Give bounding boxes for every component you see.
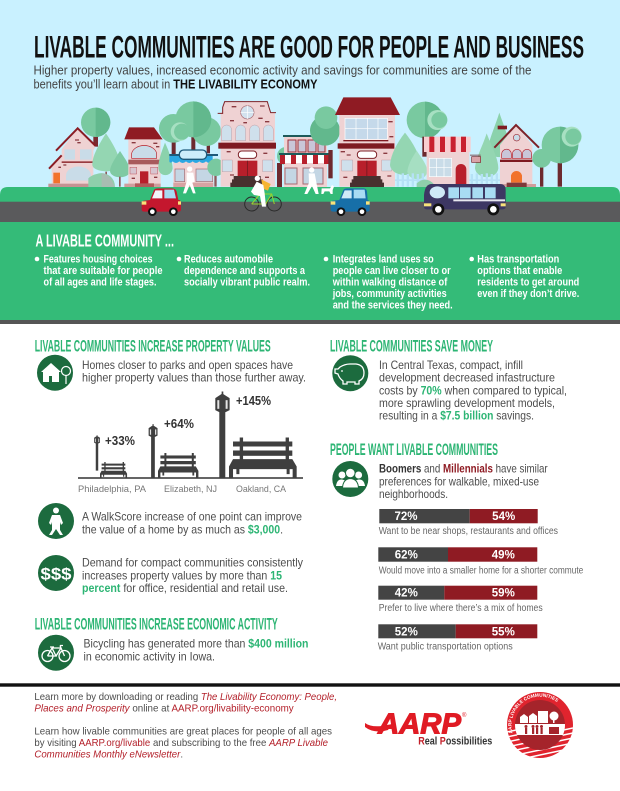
icon: pedestrian: [38, 503, 74, 539]
text block: boomers and millennials: preferences for walkable, mixed-use: [379, 474, 539, 488]
footer rule: [0, 683, 620, 687]
subtitle: [34, 62, 532, 91]
bar: near shops: 54%: [492, 511, 515, 523]
bullet: automobile dependence: [177, 254, 310, 288]
bar: smaller home: 62%: [395, 550, 418, 562]
bar: mix of homes: 42%: [395, 588, 418, 600]
icon: person walking dog: [304, 167, 334, 194]
road: [0, 202, 620, 222]
heading: LIVABLE COMMUNITIES INCREASE ECONOMIC ACTIVITY: [35, 616, 278, 634]
text block: central texas: costs by 70% when compared to typical,: [379, 383, 567, 397]
icon: bus: [424, 184, 506, 215]
text block: walkscore: A WalkScore increase of one point can improve: [82, 510, 302, 524]
footer text: learn more: [34, 691, 337, 715]
lamp and bench: Philadelphia: Philadelphia, PA: [78, 484, 147, 495]
text block: walkscore: the value of a home by as much as $3,000.: [82, 522, 283, 536]
middle shop: [277, 135, 331, 187]
bar: mix of homes: 59%: [492, 588, 515, 600]
text block: compact demand: percent for office, residential and retail use.: [82, 581, 288, 595]
subtitle: benefits you’ll learn about in THE LIVABILITY ECONOMY: [34, 76, 318, 91]
icon: red car: [142, 188, 181, 216]
bar: mix of homes: [378, 586, 543, 614]
text block: bicycling: [84, 637, 308, 664]
pointed trees: [92, 133, 120, 171]
grass strip: [0, 187, 620, 204]
street scene: buildings and trees: [48, 97, 582, 187]
footer text: learn how: Learn how livable communities are great places for people of all ages: [34, 725, 332, 737]
bullet: housing choices: [35, 254, 163, 288]
bullet: transportation options: [469, 254, 579, 300]
text block: central texas: In Central Texas, compact, infill: [379, 358, 523, 372]
bullet: transportation options: residents to get around: [477, 276, 579, 288]
bullet: automobile dependence: dependence and supports a: [184, 265, 306, 277]
badge: AARP Livable Communities: [507, 692, 573, 758]
subtitle: Higher property values, increased economic activity and savings for communities are some of the: [34, 62, 532, 77]
panel: a livable community: [0, 222, 620, 324]
bar: public transportation: 55%: [492, 626, 515, 638]
icon: cyclist: [245, 176, 281, 211]
lamp and bench: Philadelphia: +33%: [105, 433, 135, 448]
text block: parks: Homes closer to parks and open spaces have: [82, 358, 293, 372]
right house: [498, 126, 507, 129]
hero background: sky: [0, 0, 620, 204]
footer text: learn more: Places and Prosperity online at AARP.org/livability-economy: [34, 703, 294, 715]
bullet: transportation options: even if they don’t drive.: [477, 288, 579, 300]
bullet: integrated land uses: [324, 254, 453, 312]
bar: mix of homes: Prefer to live where there’s a mix of homes: [379, 603, 543, 614]
small red-roof house: [128, 139, 161, 185]
bullet: integrated land uses: and the services they need.: [333, 300, 453, 312]
bullet: housing choices: of all ages and life stages.: [44, 276, 156, 288]
footer text: learn how: by visiting AARP.org/livable and subscribing to the free AARP Livable: [34, 737, 328, 749]
text block: central texas: resulting in a $7.5 billion savings.: [379, 409, 534, 423]
text block: walkscore: [82, 510, 302, 536]
heading: A LIVABLE COMMUNITY ...: [36, 231, 174, 251]
icon: house and tree: [37, 355, 73, 391]
icon: dollar signs: [38, 555, 74, 591]
text block: compact demand: Demand for compact communities consistently: [82, 556, 303, 570]
right trees: [540, 165, 543, 187]
bar: smaller home: [378, 547, 584, 576]
text block: parks: higher property values than those further away.: [82, 371, 306, 385]
icon: piggy bank: [332, 355, 368, 391]
bullet: transportation options: options that enable: [477, 265, 562, 277]
AARP logo: Real Possibilities: [418, 735, 492, 747]
footer text: learn how: Communities Monthly eNewsletter.: [34, 748, 183, 760]
panel: economic activity: [35, 616, 308, 671]
bar: public transportation: 52%: [395, 626, 418, 638]
bar: public transportation: Want public transportation options: [378, 641, 513, 652]
icon: group of people: [332, 461, 368, 497]
bullet: transportation options: Has transportation: [477, 254, 560, 266]
bar: public transportation: [378, 624, 537, 652]
pointed trees and fences: [488, 113, 510, 157]
lamp and bench: Oakland: [215, 392, 297, 495]
AARP logo: ®: [462, 712, 467, 719]
lamp and bench: Elizabeth: +64%: [164, 416, 194, 431]
bar: near shops: [379, 509, 558, 537]
panel: people want livable communities: [330, 441, 584, 652]
lamp and bench: Oakland: Oakland, CA: [236, 484, 287, 495]
bar: smaller home: Would move into a smaller home for a shorter commute: [379, 565, 584, 576]
chart: park benches and lamps: [78, 392, 303, 495]
text block: central texas: more sprawling development models,: [379, 396, 555, 410]
text block: central texas: development decreased infastructure: [379, 371, 555, 385]
text block: central texas: [379, 358, 567, 423]
tall gabled building: [218, 102, 275, 187]
panel: property values: [35, 338, 306, 595]
text block: bicycling: in economic activity in Iowa.: [84, 650, 215, 664]
lamp and bench: Philadelphia: [78, 433, 147, 495]
text block: parks: [82, 358, 306, 385]
icon: dollar signs: $$$: [40, 564, 72, 584]
blue awning shop: [173, 162, 213, 187]
text block: boomers and millennials: neighborhoods.: [379, 487, 448, 501]
lamp and bench: Elizabeth: [149, 416, 217, 495]
left half of the street: [48, 101, 276, 187]
badge: AARP Livable Communities: AARP LIVABLE COMMUNITIES: [508, 693, 558, 734]
AARP logo: [365, 708, 492, 747]
text block: compact demand: [82, 556, 303, 595]
vehicles and people: [142, 166, 506, 216]
bar: smaller home: 49%: [492, 550, 515, 562]
bullet: housing choices: that are suitable for people: [44, 265, 162, 277]
text block: boomers and millennials: Boomers and Millennials have similar: [379, 462, 548, 476]
striped awning shop: [427, 150, 469, 186]
left house: [52, 128, 96, 185]
lamp and bench: Oakland: +145%: [236, 393, 271, 408]
text block: bicycling: Bicycling has generated more than $400 million: [84, 637, 308, 651]
bullet: integrated land uses: Integrates land uses so: [333, 254, 434, 266]
icon: bicycle: [38, 635, 74, 671]
bullet: automobile dependence: Reduces automobile: [184, 254, 273, 266]
heading: LIVABLE COMMUNITIES INCREASE PROPERTY VALUES: [35, 338, 271, 356]
lamp and bench: Elizabeth: Elizabeth, NJ: [164, 484, 217, 495]
bullet: integrated land uses: within walking distance of: [332, 276, 448, 288]
icon: blue car: [331, 188, 370, 216]
right half of the street: [310, 97, 582, 187]
text block: boomers and millennials: [379, 462, 548, 501]
AARP logo: AARP: [377, 708, 462, 740]
text block: compact demand: increases property values by more than 15: [82, 568, 282, 582]
bullet: integrated land uses: jobs, community activities: [332, 288, 447, 300]
bar: near shops: Want to be near shops, restaurants and offices: [379, 526, 558, 537]
bullet: automobile dependence: socially vibrant public realm.: [184, 276, 310, 288]
panel: save money: [330, 338, 567, 423]
large red-roof house: [339, 114, 395, 187]
icon: walking person: [183, 166, 196, 193]
footer text: learn more: Learn more by downloading or reading The Livability Economy: People,: [34, 691, 337, 703]
bar: near shops: 72%: [394, 511, 418, 523]
bullet: integrated land uses: people can live closer to or: [333, 265, 451, 277]
footer text: learn how: [34, 725, 332, 760]
bullet: housing choices: Features housing choices: [44, 254, 152, 266]
